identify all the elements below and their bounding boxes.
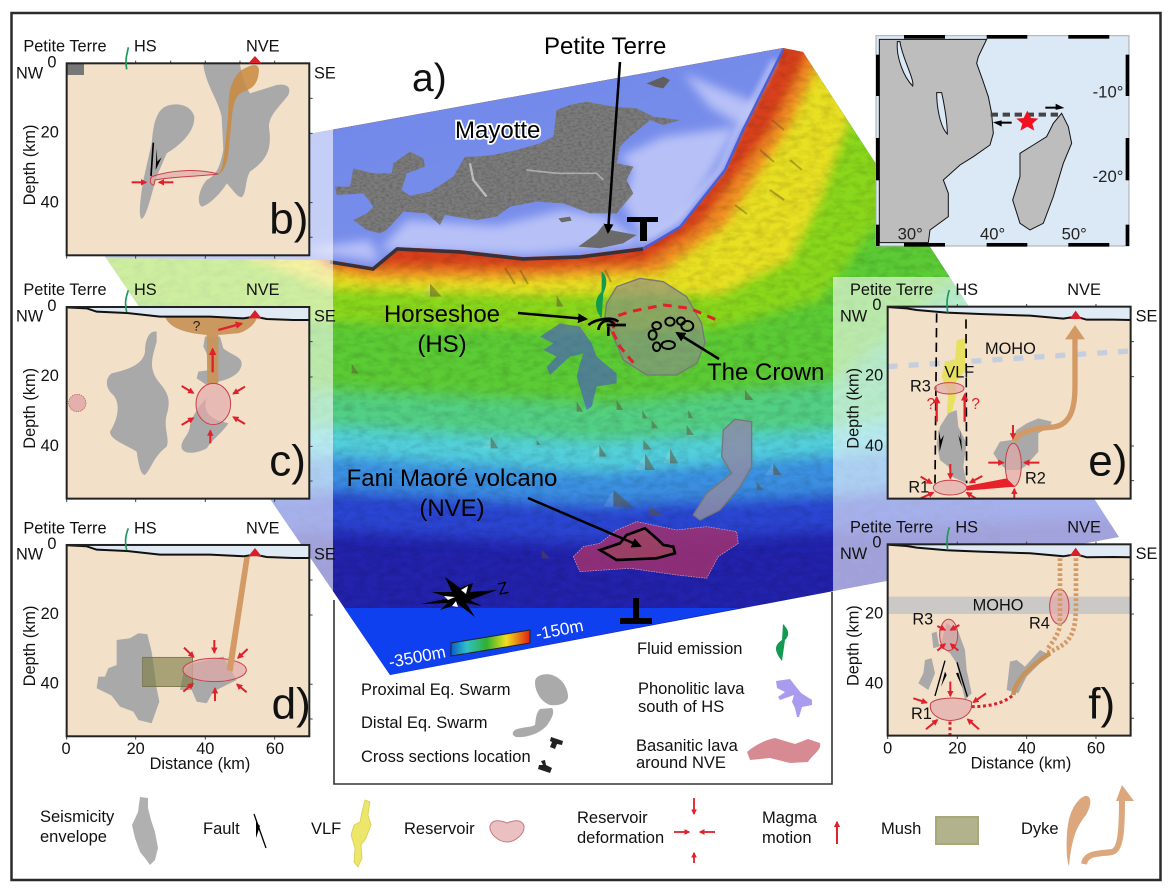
section labels: 20 [41, 605, 59, 623]
depth patch [67, 63, 84, 75]
VLF [942, 338, 965, 413]
distance axis: 60 [266, 740, 284, 758]
section labels: 40 [41, 675, 59, 693]
inset labels: -10° [1093, 82, 1123, 101]
legend text: cross sections: Cross sections location [361, 748, 531, 766]
dyke [1014, 325, 1085, 442]
section labels: SE [314, 545, 336, 563]
seabed [67, 307, 309, 320]
panel letter: f) [1088, 679, 1115, 728]
dyke [227, 557, 250, 672]
label: Mayotte: Mayotte [455, 117, 540, 144]
panel a: bathymetric map [104, 36, 1119, 675]
legend: magma motion [762, 809, 837, 847]
axes ticks [67, 342, 313, 502]
dyke [218, 65, 259, 174]
legend text: proximal: Proximal Eq. Swarm [361, 681, 510, 699]
whitened map area behind left sections [14, 28, 333, 776]
distance axis: Distance (km) [150, 755, 250, 773]
NVE marker [248, 56, 262, 63]
label: Horseshoe (HS): (HS) [417, 331, 467, 358]
icon: fluid emission [776, 624, 788, 661]
distance axis: Distance (km) [971, 755, 1071, 773]
section labels: Petite Terre [850, 281, 933, 299]
section labels [16, 38, 336, 211]
colour bar [451, 630, 530, 656]
water [888, 544, 1131, 557]
cross-section marker: north [627, 217, 658, 241]
plot background [67, 545, 309, 736]
question marks: ? [927, 396, 935, 413]
fluid emission [596, 272, 606, 318]
panel letter: e) [1088, 437, 1127, 486]
HS vent [126, 47, 128, 69]
phonolitic lava [540, 323, 617, 410]
legend: VLF: VLF [311, 820, 341, 838]
lagoon [66, 48, 783, 267]
seismicity left [107, 331, 169, 475]
seismicity left fragments [918, 658, 935, 690]
question marks: ? [971, 396, 980, 413]
distance axis [61, 740, 284, 773]
legend: reservoir deformation [577, 798, 715, 863]
box borders [334, 592, 832, 784]
section labels [16, 519, 336, 693]
Africa [879, 39, 993, 243]
legend text: fluid: Fluid emission [637, 640, 742, 658]
NVE marker [1070, 548, 1082, 556]
arrow: Petite Terre [608, 62, 620, 232]
section labels [840, 518, 1158, 692]
section labels: 0 [872, 296, 881, 314]
section labels: 20 [865, 367, 883, 385]
plot background [67, 307, 309, 499]
inset location map [876, 35, 1129, 247]
section labels: Depth (km) [21, 606, 39, 686]
section labels: 40 [865, 674, 883, 692]
panel f: cross-section [840, 518, 1158, 773]
colour bar min label: -3500m [387, 642, 447, 672]
plot background [67, 63, 309, 255]
arrow: Horseshoe [518, 313, 586, 319]
icon: compass [421, 577, 510, 617]
plot border [67, 307, 309, 499]
section labels: HS [955, 281, 978, 299]
section labels: NW [16, 545, 44, 563]
reservoir labels: R3 [910, 378, 931, 396]
water [67, 545, 309, 558]
reservoir labels: R1 [908, 479, 929, 497]
Mayotte island [330, 77, 683, 248]
section labels: 40 [41, 437, 59, 455]
section labels: Petite Terre [23, 281, 107, 299]
section labels: HS [134, 281, 157, 299]
section labels: Depth (km) [844, 368, 862, 449]
section labels: Depth (km) [21, 368, 39, 449]
basanitic lava [573, 522, 738, 578]
inset axis ticks [876, 35, 1129, 247]
panel letter: c) [269, 437, 306, 486]
label MOHO: MOHO [973, 597, 1023, 615]
faults [935, 661, 967, 697]
label: The Crown: The Crown [707, 359, 824, 386]
distance axis: 60 [1087, 740, 1105, 758]
reservoir [150, 171, 218, 185]
section labels: NVE [246, 281, 280, 299]
icon: cross section markers [538, 737, 563, 773]
section labels: 20 [41, 367, 59, 385]
arrow: The Crown [677, 333, 719, 359]
distance axis: 20 [948, 740, 966, 758]
legend: dyke [1021, 785, 1134, 866]
section labels: HS [134, 519, 157, 537]
distance axis: 0 [883, 740, 892, 758]
inset labels: -20° [1093, 167, 1123, 186]
section labels: SE [314, 308, 336, 326]
lagoon light shallows [300, 73, 767, 262]
section labels [16, 281, 336, 455]
seamounts [352, 283, 782, 558]
label MOHO: MOHO [985, 340, 1036, 358]
NVE marker [1070, 311, 1082, 319]
inset labels: 40° [980, 224, 1005, 243]
section labels: NVE [1067, 518, 1101, 536]
fault [151, 143, 162, 176]
reservoir [196, 383, 231, 425]
magma motion arrows [213, 324, 242, 372]
Horseshoe symbol [588, 319, 626, 336]
HS vent [126, 528, 128, 550]
water [67, 307, 309, 320]
shear arrows [996, 105, 1061, 125]
distance axis: 20 [127, 740, 145, 758]
reservoir labels: R1 [911, 705, 932, 723]
NVE volcano outline [600, 528, 675, 560]
axes ticks [888, 542, 1134, 739]
vertical fault dashes [935, 313, 967, 483]
panel d: cross-section [16, 519, 336, 773]
section labels: 0 [872, 533, 881, 551]
legend: fault [203, 814, 266, 848]
legend: seismicity envelope: envelope [40, 828, 107, 846]
arrows [921, 395, 1039, 499]
reservoir [183, 658, 246, 682]
reservoirs R1 R3 R4 [930, 589, 1069, 721]
HS vent [126, 290, 128, 312]
section labels: HS [134, 38, 157, 56]
deformation arrows [913, 625, 986, 729]
deformation arrows [132, 179, 173, 185]
legend text: phonolitic: Phonolitic lava [638, 680, 745, 698]
NVE marker [248, 310, 262, 318]
question mark: ? [193, 318, 201, 334]
star: study area [1016, 111, 1038, 131]
reservoir labels: R3 [912, 610, 933, 628]
label: Petite Terre: Petite Terre [544, 33, 666, 60]
seabed [67, 545, 309, 558]
legend: dyke: Dyke [1021, 820, 1059, 838]
legend: seismicity envelope [40, 797, 158, 865]
bottom legend [40, 785, 1134, 867]
reservoir labels [908, 363, 1046, 497]
legend: magma motion: Magma [762, 809, 818, 827]
distance axis: 40 [1018, 740, 1036, 758]
colour bar max label: -150m [534, 616, 585, 644]
icon: proximal swarm [535, 674, 568, 705]
seabed [888, 307, 1131, 320]
terrain texture [100, 50, 1000, 610]
section labels: 20 [865, 604, 883, 622]
section labels: HS [955, 518, 978, 536]
section labels: SE [1136, 545, 1158, 563]
reservoirs R1 R2 R3 [933, 383, 1021, 495]
terrain colour ramp [104, 48, 1119, 675]
legend: mush [881, 817, 978, 844]
section labels: 0 [47, 297, 56, 315]
section labels: 0 [47, 535, 56, 553]
lakes [897, 42, 947, 134]
inset labels [898, 82, 1123, 243]
section labels: 20 [41, 123, 59, 141]
deformation arrows [183, 640, 248, 701]
section labels: NVE [1067, 281, 1101, 299]
axes ticks [957, 304, 1134, 481]
reservoir labels [911, 610, 1050, 723]
reservoir labels: R4 [1029, 614, 1050, 632]
distance axis: 0 [61, 740, 71, 758]
seismicity right [1007, 650, 1050, 693]
seabed [888, 545, 1131, 557]
legend text: phonolitic: south of HS [638, 698, 724, 716]
mush [143, 657, 193, 687]
legend: seismicity envelope: Seismicity [40, 808, 115, 826]
dotted magma path [950, 695, 1013, 736]
deformation arrows [182, 386, 245, 443]
slope streaks [505, 120, 802, 284]
plot border [67, 63, 309, 255]
dotted dyke [1047, 558, 1076, 653]
MOHO dashed [888, 351, 1131, 367]
magma wedge [967, 478, 1015, 491]
old reservoir [69, 394, 86, 412]
section labels: NW [840, 545, 868, 563]
seismicity right [993, 418, 1052, 470]
legend: magma motion: motion [762, 829, 812, 847]
section labels: Petite Terre [850, 518, 933, 536]
dashed plate boundary [991, 109, 1063, 121]
icon: distal swarm [513, 708, 553, 737]
seismicity centre [940, 623, 972, 700]
legend text: basanitic: around NVE [636, 754, 726, 772]
map overlays [540, 272, 752, 578]
magma sill and conduit [165, 317, 257, 383]
icon: phonolitic lava [776, 679, 812, 717]
seismicity left [937, 410, 967, 483]
plot border [67, 545, 309, 736]
legend box for map a [334, 592, 832, 784]
legend: reservoir deformation: Reservoir [577, 809, 648, 827]
water [888, 307, 1131, 320]
section labels: Petite Terre [23, 519, 107, 537]
legend: reservoir: Reservoir [404, 820, 475, 838]
distance axis [883, 740, 1105, 773]
panel b: cross-section [16, 38, 336, 259]
panel c: cross-section [16, 281, 336, 502]
red dashed caldera line [613, 305, 717, 328]
section labels: NW [16, 64, 44, 82]
proximal swarm [605, 278, 705, 375]
legend: fault: Fault [203, 820, 240, 838]
section labels: NVE [246, 519, 280, 537]
section labels: Depth (km) [844, 605, 862, 686]
plot border [888, 544, 1131, 736]
NVE marker [248, 548, 262, 556]
section labels [840, 281, 1158, 455]
section labels: 0 [47, 53, 56, 71]
section labels: Depth (km) [21, 125, 39, 205]
plot background [888, 307, 1131, 499]
legend: reservoir deformation: deformation [577, 829, 664, 847]
axes ticks [67, 61, 313, 259]
MOHO band [888, 597, 1131, 614]
seismicity right [199, 64, 289, 207]
panel letter: b) [269, 194, 308, 243]
section labels: NW [840, 308, 868, 326]
section labels: NW [16, 308, 44, 326]
label: a): a) [412, 57, 447, 100]
panel letter: d) [272, 679, 311, 728]
distance axis: 40 [196, 740, 214, 758]
seismicity left [97, 633, 159, 723]
section labels: SE [1136, 308, 1158, 326]
HS vent [947, 527, 949, 550]
section labels: Petite Terre [23, 38, 107, 56]
seismicity right [180, 657, 237, 703]
flat base strip [341, 608, 739, 675]
legend: reservoir [404, 820, 524, 842]
panel e: cross-section [840, 281, 1158, 499]
icon: basanitic lava [747, 738, 820, 763]
legend text: distal: Distal Eq. Swarm [361, 714, 488, 732]
Crown ring outlines [649, 317, 693, 351]
axes ticks [67, 580, 313, 740]
distal swarm [693, 419, 752, 520]
solid dyke [1013, 653, 1050, 695]
cross-section marker: south [620, 598, 652, 624]
HS vent [947, 290, 949, 313]
label: Fani Maoré volcano (NVE): (NVE) [419, 495, 485, 522]
section labels: 40 [865, 437, 883, 455]
plot border [888, 307, 1131, 499]
section labels: 40 [41, 193, 59, 211]
seismicity small fragments [932, 632, 939, 648]
question marks [927, 396, 980, 413]
legend: mush: Mush [881, 820, 921, 838]
legend: VLF [311, 800, 371, 867]
reservoir labels: R2 [1025, 469, 1046, 487]
arrow: Fani Maoré [528, 498, 640, 546]
section labels: SE [314, 64, 336, 82]
fault arrows [939, 429, 962, 452]
inset labels: 50° [1062, 224, 1087, 243]
Madagascar [1013, 113, 1072, 230]
inset labels: 30° [898, 224, 923, 243]
section labels: NVE [246, 38, 280, 56]
seismicity left [140, 104, 194, 219]
icon: compass: Z [496, 578, 510, 599]
plot background [888, 544, 1131, 736]
legend text: basanitic: Basanitic lava [636, 737, 739, 755]
reservoir labels: VLF [944, 363, 974, 381]
label: Fani Maoré volcano (NVE): Fani Maoré volcano [347, 465, 557, 492]
inset frame [876, 36, 1129, 246]
label: Horseshoe (HS): Horseshoe [384, 301, 500, 328]
seismicity right [181, 337, 242, 453]
whitened map area behind right sections [833, 277, 1159, 782]
